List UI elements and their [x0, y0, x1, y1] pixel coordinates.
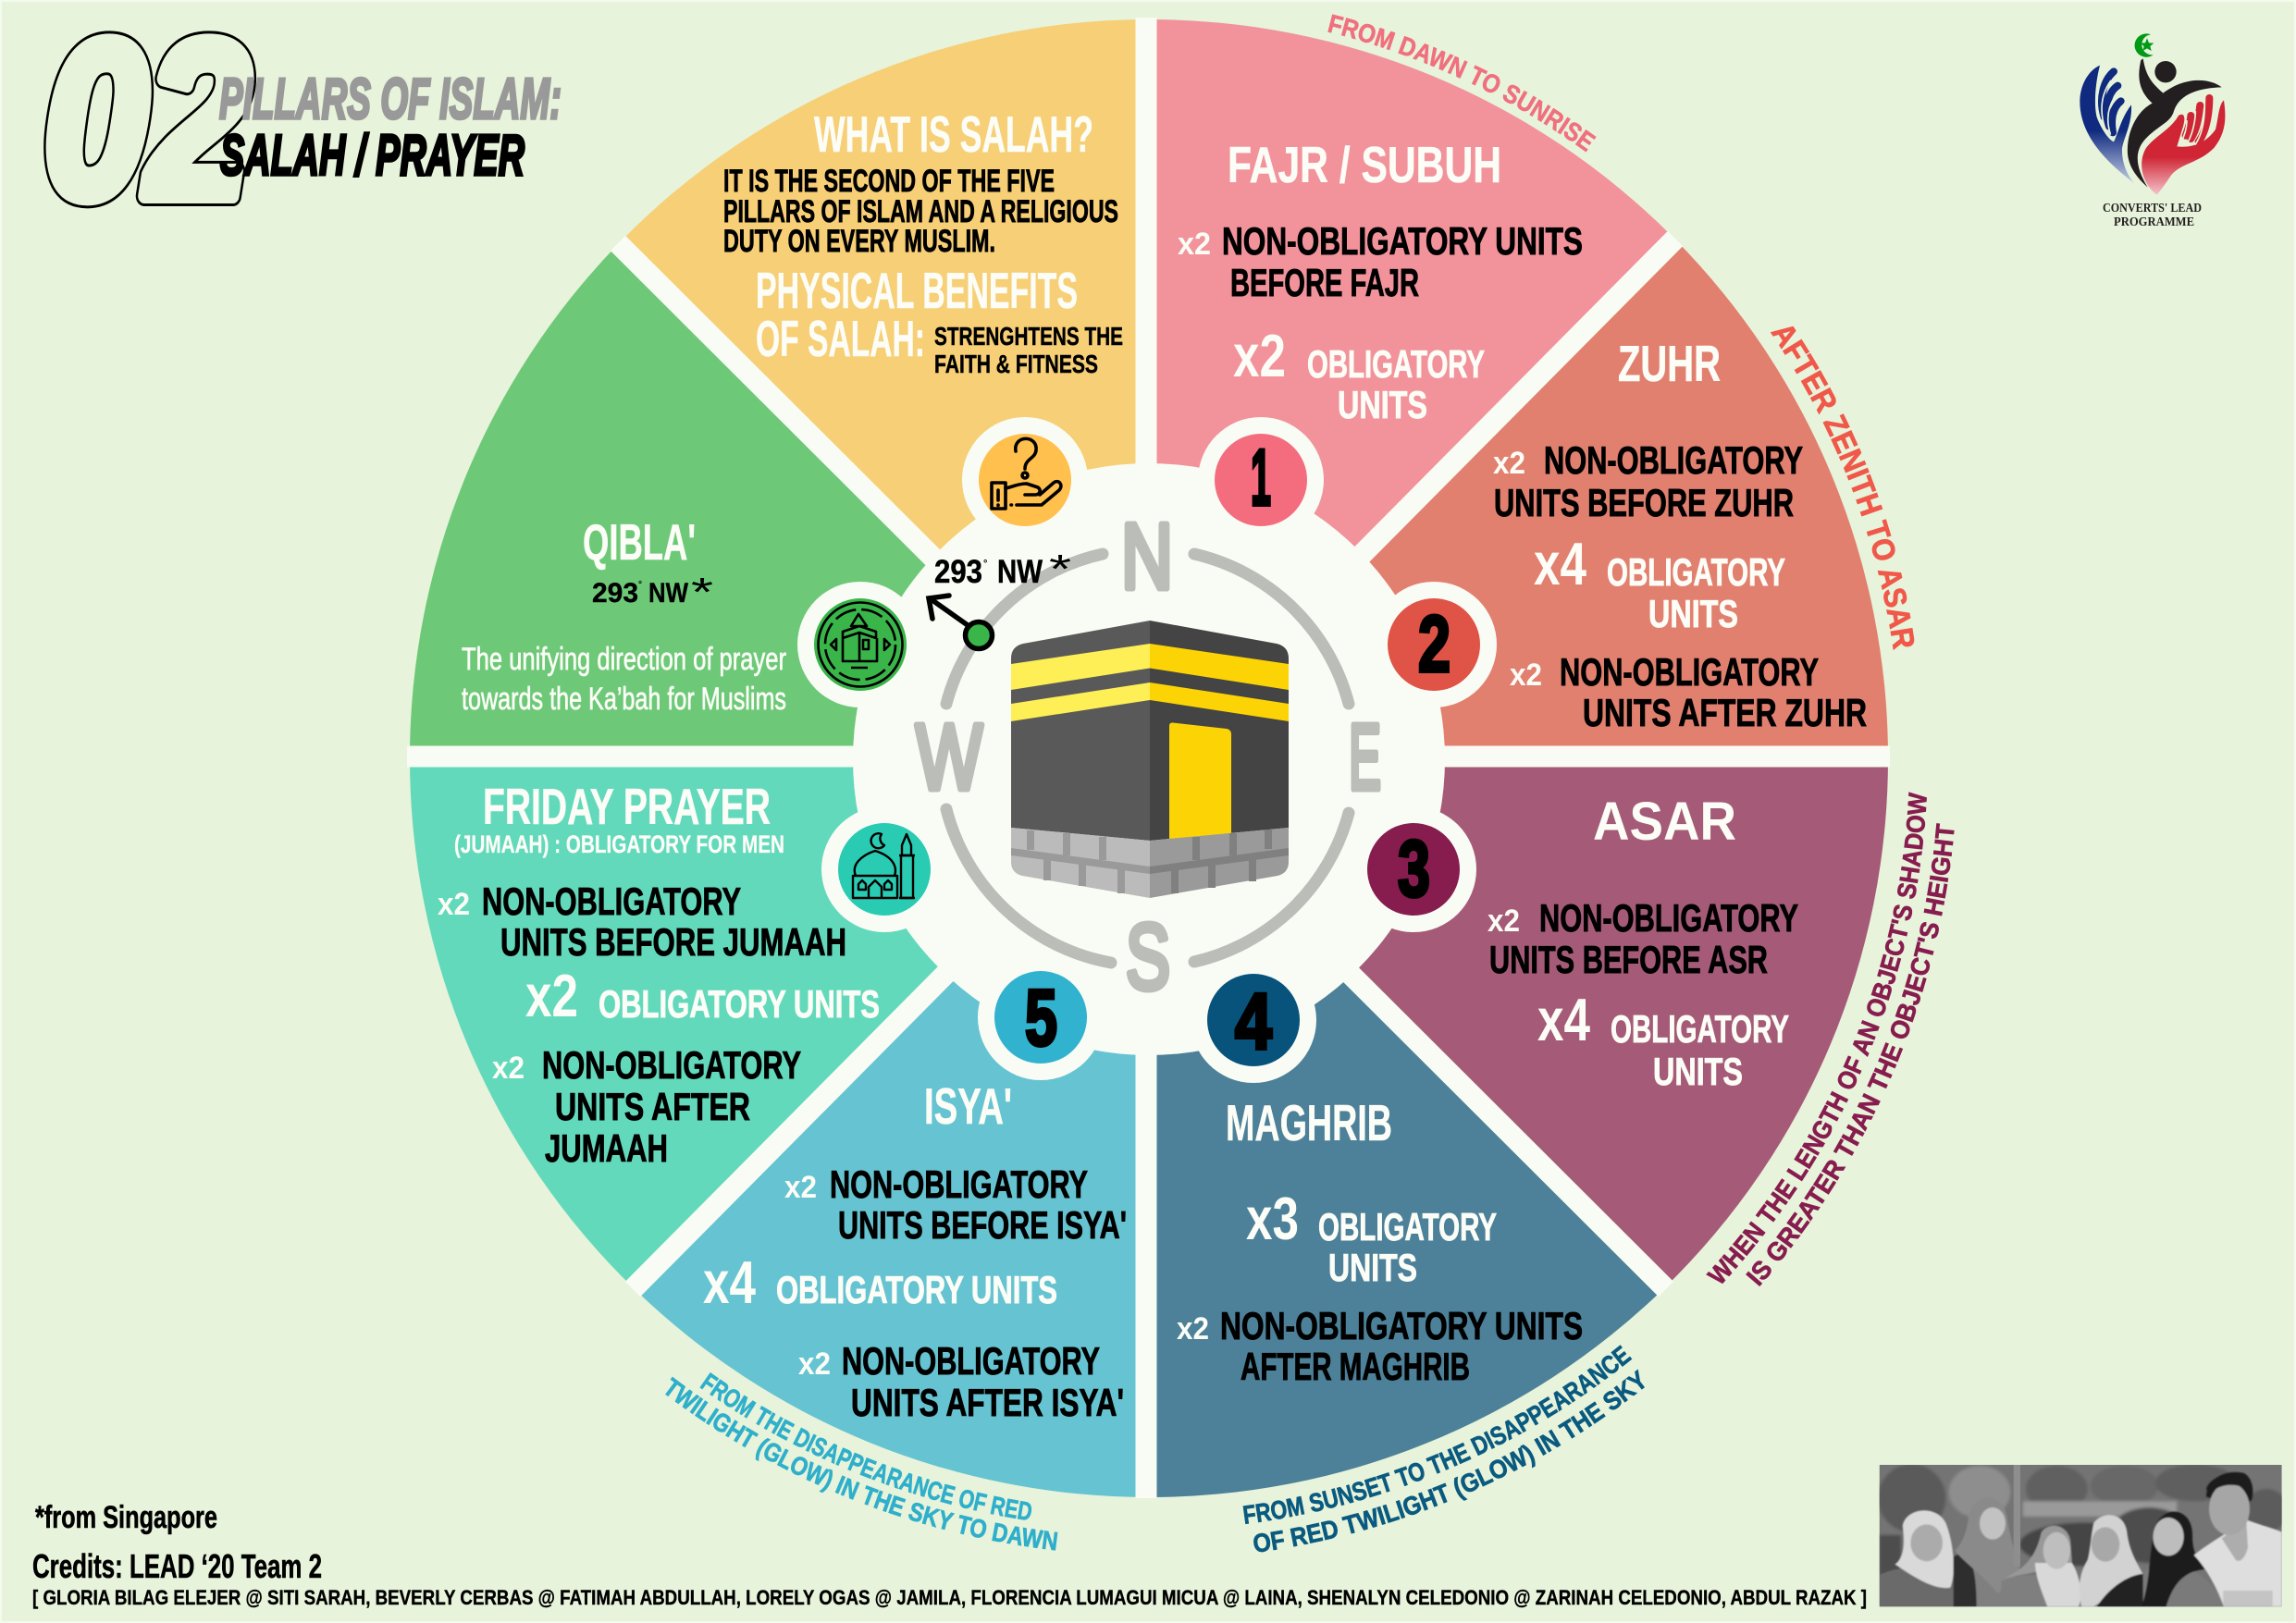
text block: before isya: UNITS BEFORE ISYA' [838, 1203, 1127, 1247]
icon: kaaba emblem [814, 598, 907, 691]
text block: before fajr: BEFORE FAJR [1230, 261, 1419, 304]
photo: team group [1878, 1464, 2288, 1606]
heading: maghrib: MAGHRIB [1226, 1094, 1392, 1151]
text block: after maghrib: AFTER MAGHRIB [1241, 1345, 1470, 1388]
text block: after jumaah: JUMAAH [545, 1126, 668, 1170]
icon: number 2: 2 [1418, 600, 1450, 689]
compass letter E: E [1349, 706, 1381, 809]
icon: kaaba [1011, 621, 1289, 898]
heading: fajr / subuh: FAJR / SUBUH [1228, 136, 1501, 193]
label: 293 NW [934, 547, 1071, 592]
text block: qibla description: towards the Ka’bah for Muslims [462, 682, 786, 717]
heading: what is salah: WHAT IS SALAH? [814, 105, 1093, 163]
text block: after jumaah: UNITS AFTER [555, 1085, 750, 1128]
person 4 [2080, 1515, 2143, 1606]
text block: obligatory zuhr: OBLIGATORY [1607, 550, 1785, 594]
compass letter S: S [1126, 905, 1170, 1009]
panel: isya [634, 763, 1146, 1497]
text block: before asr [1487, 896, 1798, 981]
curved caption: isya time: TWILIGHT (GLOW) IN THE SKY TO DAWN [665, 1376, 1058, 1551]
text block: obligatory zuhr [1534, 530, 1785, 635]
icon: number 4: 4 [1235, 977, 1272, 1066]
title number 02: 02 [44, 0, 250, 243]
text block: benefits [934, 322, 1123, 378]
text block: jumaah: (JUMAAH) : OBLIGATORY FOR MEN [454, 830, 784, 858]
logo text [2103, 202, 2202, 229]
text block: obligatory asar [1537, 986, 1789, 1093]
text block: obligatory maghrib: x3 [1246, 1185, 1299, 1252]
centre disc with icon rings [797, 417, 1497, 1083]
title line 1: PILLARS OF ISLAM: [219, 68, 562, 131]
text block: before isya: NON-OBLIGATORY [830, 1162, 1088, 1206]
icon: number 1 [1215, 434, 1307, 526]
text block: obligatory fajr: x2 [1233, 322, 1286, 389]
footnote: *from Singapore [35, 1500, 217, 1535]
text block: before isya: x2 [784, 1170, 817, 1205]
credits heading: Credits: LEAD ‘20 Team 2 [32, 1547, 322, 1585]
text block: after maghrib [1177, 1304, 1583, 1388]
text block: before asr: NON-OBLIGATORY [1539, 896, 1798, 940]
text block: after zuhr: NON-OBLIGATORY [1560, 650, 1819, 694]
curved caption: asar time: WHEN THE LENGTH OF AN OBJECT'S SHADOW [1706, 792, 1927, 1284]
text block: before zuhr: NON-OBLIGATORY [1544, 438, 1803, 482]
text block: after isya: x2 [798, 1346, 831, 1382]
text block: definition [723, 164, 1118, 259]
text block: before zuhr: x2 [1493, 446, 1525, 481]
panel: maghrib [1146, 763, 1665, 1497]
text block: benefits: STRENGHTENS THE [934, 322, 1123, 350]
text block: before fajr [1178, 219, 1583, 304]
text block: before fajr: x2 [1178, 227, 1211, 262]
text block: qibla description: The unifying direction of prayer [462, 642, 786, 677]
text block: before isya [784, 1162, 1127, 1247]
label: qibla bearing [592, 570, 713, 615]
gap dividers [407, 18, 1890, 1498]
text block: qibla description [462, 642, 786, 717]
label: qibla bearing: * [691, 570, 713, 615]
text block: obligatory zuhr: x4 [1534, 530, 1586, 597]
text block: obligatory maghrib: OBLIGATORY [1318, 1205, 1497, 1248]
text block: before zuhr [1493, 438, 1803, 524]
logo text: PROGRAMME [2114, 215, 2194, 229]
text block: obligatory friday: x2 [525, 962, 578, 1029]
text block: obligatory asar: x4 [1537, 986, 1590, 1053]
person 6 [2194, 1519, 2282, 1606]
qibla direction arrow [929, 596, 992, 649]
text block: after jumaah: x2 [492, 1051, 525, 1086]
text block: before zuhr: UNITS BEFORE ZUHR [1494, 481, 1794, 524]
logo: converts lead programme [2080, 33, 2225, 195]
curved caption: zuhr time: AFTER ZENITH TO ASAR [1771, 326, 1915, 650]
label: qibla bearing: NW [648, 578, 689, 609]
text block: obligatory fajr: UNITS [1338, 383, 1427, 426]
text block: definition: PILLARS OF ISLAM AND A RELIGIOUS [723, 194, 1118, 229]
text block: definition: IT IS THE SECOND OF THE FIVE [723, 164, 1055, 199]
heading: friday prayer: FRIDAY PRAYER [483, 778, 771, 835]
text block: obligatory asar: UNITS [1653, 1050, 1743, 1093]
text block: after jumaah: NON-OBLIGATORY [542, 1043, 801, 1087]
panel: qibla [410, 244, 1146, 763]
text block: before jumaah: NON-OBLIGATORY [482, 879, 741, 923]
label: 293 NW: NW [997, 554, 1043, 590]
text block: before asr: x2 [1487, 904, 1520, 939]
text block: after maghrib: NON-OBLIGATORY UNITS [1220, 1304, 1583, 1347]
compass letter W: W [916, 706, 982, 809]
panel: asar [1146, 756, 1888, 1287]
icon: red hand [2142, 98, 2225, 195]
panel: what is salah [619, 19, 1146, 763]
text block: benefits: FAITH & FITNESS [934, 350, 1098, 378]
text block: before jumaah: x2 [438, 887, 470, 922]
icon: figure [2128, 58, 2222, 188]
icon: number 1: 1 [1251, 434, 1271, 523]
label: qibla bearing: 293 [592, 578, 638, 609]
heading: qibla: QIBLA' [583, 513, 696, 571]
icon: mosque [838, 823, 931, 916]
text block: before asr: UNITS BEFORE ASR [1489, 938, 1768, 981]
curved caption: maghrib time: FROM SUNSET TO THE DISAPPEARANCE [1243, 1345, 1632, 1524]
heading: physical benefits: PHYSICAL BENEFITS [756, 262, 1078, 319]
heading: asar: ASAR [1593, 792, 1736, 852]
text block: obligatory zuhr: UNITS [1648, 592, 1738, 635]
compass ring [946, 554, 1349, 963]
icon: number 3: 3 [1398, 825, 1430, 914]
text block: obligatory isya [703, 1248, 1057, 1316]
text block: obligatory friday [525, 962, 880, 1029]
title line 2: SALAH / PRAYER [220, 124, 525, 188]
text block: after zuhr: x2 [1510, 658, 1542, 693]
curved caption: maghrib time: OF RED TWILIGHT (GLOW) IN THE SKY [1253, 1369, 1645, 1552]
label: 293 NW: 293 [934, 554, 982, 590]
text block: obligatory fajr [1233, 322, 1485, 426]
text block: before jumaah [438, 879, 846, 964]
icon: number 2 [1388, 598, 1480, 691]
text block: definition: DUTY ON EVERY MUSLIM. [723, 224, 995, 259]
curved caption: asar time: IS GREATER THAN THE OBJECT'S HEIGHT [1746, 823, 1955, 1287]
text block: after zuhr [1510, 650, 1867, 734]
credits names: [ GLORIA BILAG ELEJER @ SITI SARAH, BEVERLY CERBAS @ FATIMAH ABDULLAH, LORELY OGAS @ JAMILA, FLORENCIA LUMAGUI MICUA @ LAINA, SHENALYN CELEDONIO @ ZARINAH CELEDONIO, ABDUL RAZAK ] [32, 1586, 1867, 1609]
panel: friday prayer [410, 756, 1146, 1288]
heading: physical benefits: OF SALAH: [756, 310, 925, 367]
icon: number 5: 5 [1025, 974, 1057, 1063]
person 1 [1880, 1568, 1955, 1606]
icon: question hand [979, 434, 1071, 526]
text block: obligatory maghrib [1246, 1185, 1497, 1289]
heading: physical benefits [756, 262, 1078, 367]
icon: number 4 [1207, 974, 1300, 1066]
heading: zuhr: ZUHR [1618, 335, 1721, 392]
text block: before jumaah: UNITS BEFORE JUMAAH [500, 920, 846, 964]
text block: obligatory maghrib: UNITS [1328, 1246, 1417, 1289]
label: 293 NW: ° [983, 559, 987, 570]
text block: after isya [798, 1339, 1124, 1424]
icon: blue hand [2080, 66, 2134, 183]
text block: obligatory friday: OBLIGATORY UNITS [599, 982, 880, 1026]
title number 02: 02 [44, 0, 250, 243]
panel: zuhr [1146, 239, 1888, 763]
text block: after isya: UNITS AFTER ISYA' [851, 1381, 1124, 1424]
text block: before fajr: NON-OBLIGATORY UNITS [1222, 219, 1583, 263]
text block: obligatory isya: OBLIGATORY UNITS [776, 1268, 1057, 1311]
person 2 [1972, 1570, 2002, 1607]
text block: obligatory asar: OBLIGATORY [1611, 1007, 1789, 1051]
icon: crescent and star [2135, 33, 2154, 57]
icon: number 5 [994, 971, 1087, 1064]
heading: isya: ISYA' [924, 1077, 1012, 1135]
icon: number 3 [1367, 823, 1460, 916]
text block: after zuhr: UNITS AFTER ZUHR [1583, 691, 1867, 734]
curved caption: fajr time: FROM DAWN TO SUNRISE [1327, 14, 1597, 152]
text block: after maghrib: x2 [1177, 1311, 1209, 1346]
label: qibla bearing: ° [638, 580, 642, 590]
compass letter N: N [1121, 505, 1173, 609]
logo text: CONVERTS' LEAD [2103, 202, 2202, 215]
text block: after jumaah [492, 1043, 801, 1170]
label: 293 NW: * [1049, 547, 1071, 592]
text block: after isya: NON-OBLIGATORY [842, 1339, 1100, 1383]
curved caption: isya time: FROM THE DISAPPEARANCE OF RED [699, 1372, 1032, 1520]
text block: obligatory isya: x4 [703, 1248, 756, 1316]
text block: obligatory fajr: OBLIGATORY [1307, 342, 1485, 386]
person 3 [2001, 1575, 2081, 1606]
panel: fajr [1146, 19, 1674, 763]
person 5 [2143, 1566, 2224, 1606]
